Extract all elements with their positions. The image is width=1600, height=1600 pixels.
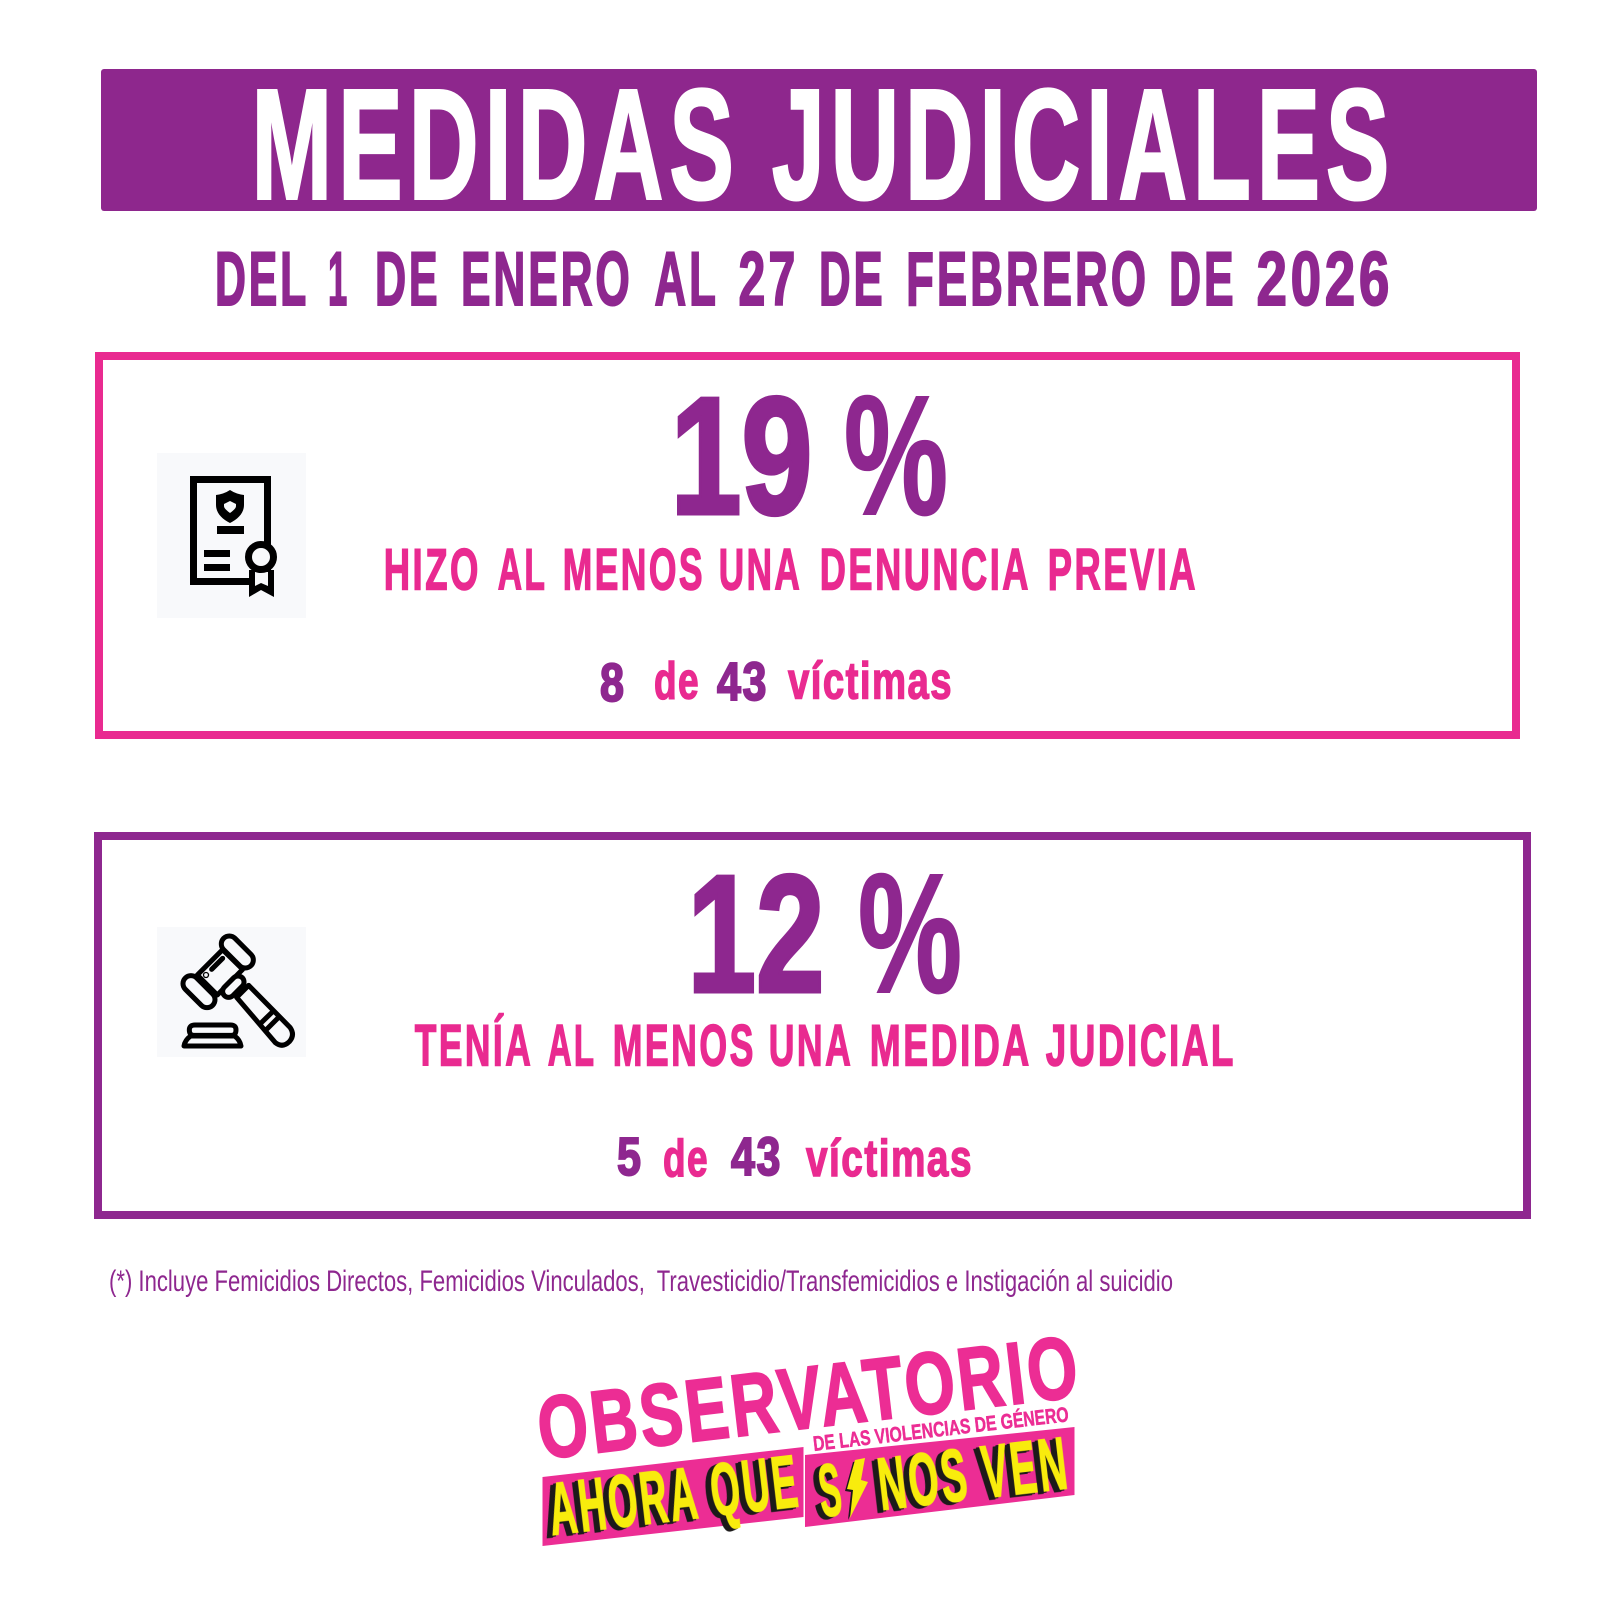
count: 8 de 43 víctimas: 8 <box>600 653 624 713</box>
subtitle: date range: 27 <box>738 237 798 321</box>
subtitle: date range: DE <box>375 237 440 321</box>
logo band: sí nos ven <box>805 1427 1074 1527</box>
panel: medida judicial: 12 <box>688 840 825 1027</box>
panel: medida judicial: % <box>858 838 962 1028</box>
title banner <box>101 56 1537 232</box>
subtitle: date range: AL <box>654 237 719 321</box>
footnote: (*) Incluye Femicidios Directos, Femicidios Vinculados, Travesticidio/Transfemicidios e Instigación al suicidio <box>109 1265 1173 1298</box>
count: 5 de 43 víctimas: 43 <box>731 1127 782 1187</box>
label: tenía al menos una medida judicial: TENÍA <box>415 1014 533 1078</box>
logo subtitle: de las violencias de género: DE LAS VIOLENCIAS DE GÉNERO <box>812 1403 1070 1456</box>
label: tenía al menos una medida judicial: UNA <box>769 1014 853 1078</box>
count: 8 de 43 víctimas: 43 <box>717 652 768 712</box>
subtitle: date range: DEL <box>215 237 309 321</box>
panel: denuncia previa: víctimas <box>788 652 953 710</box>
label: tenía al menos una medida judicial: MENOS <box>613 1014 756 1078</box>
panel: denuncia previa <box>99 356 1516 735</box>
label: hizo al menos una denuncia previa: AL <box>498 538 547 602</box>
panel: denuncia previa: % <box>844 360 948 550</box>
count: 8 de 43 víctimas: de <box>654 652 700 710</box>
percentage: 19 % <box>670 360 948 550</box>
panel: medida judicial: víctimas <box>806 1130 973 1187</box>
label: hizo al menos una denuncia previa: MENOS <box>563 538 705 602</box>
panel: medida judicial <box>98 836 1527 1215</box>
count: 8 de 43 víctimas <box>600 652 953 713</box>
icon: lightning bolt <box>847 1458 868 1518</box>
panel: denuncia previa: 19 <box>671 362 813 549</box>
count: 5 de 43 víctimas: 5 <box>617 1127 641 1187</box>
subtitle: date range: DE <box>1169 237 1237 321</box>
label: tenía al menos una medida judicial: AL <box>548 1014 596 1078</box>
logo: Observatorio Ahora Que Sí Nos Ven <box>532 1317 1085 1551</box>
subtitle: date range: ENERO <box>461 237 633 321</box>
subtitle: date range: DE <box>819 237 885 321</box>
label: hizo al menos una denuncia previa: HIZO <box>384 538 481 602</box>
logo band: ahora que <box>542 1447 804 1546</box>
logo: Observatorio Ahora Que Sí Nos Ven: S <box>814 1448 846 1533</box>
count: 5 de 43 víctimas: de <box>663 1130 709 1187</box>
count: 5 de 43 víctimas <box>617 1127 973 1187</box>
percentage: 12 % <box>688 838 962 1028</box>
label: hizo al menos una denuncia previa: UNA <box>719 538 802 602</box>
subtitle: date range: 1 <box>328 237 349 321</box>
icon: certificate document <box>157 453 306 618</box>
icon: judge gavel <box>157 927 306 1057</box>
